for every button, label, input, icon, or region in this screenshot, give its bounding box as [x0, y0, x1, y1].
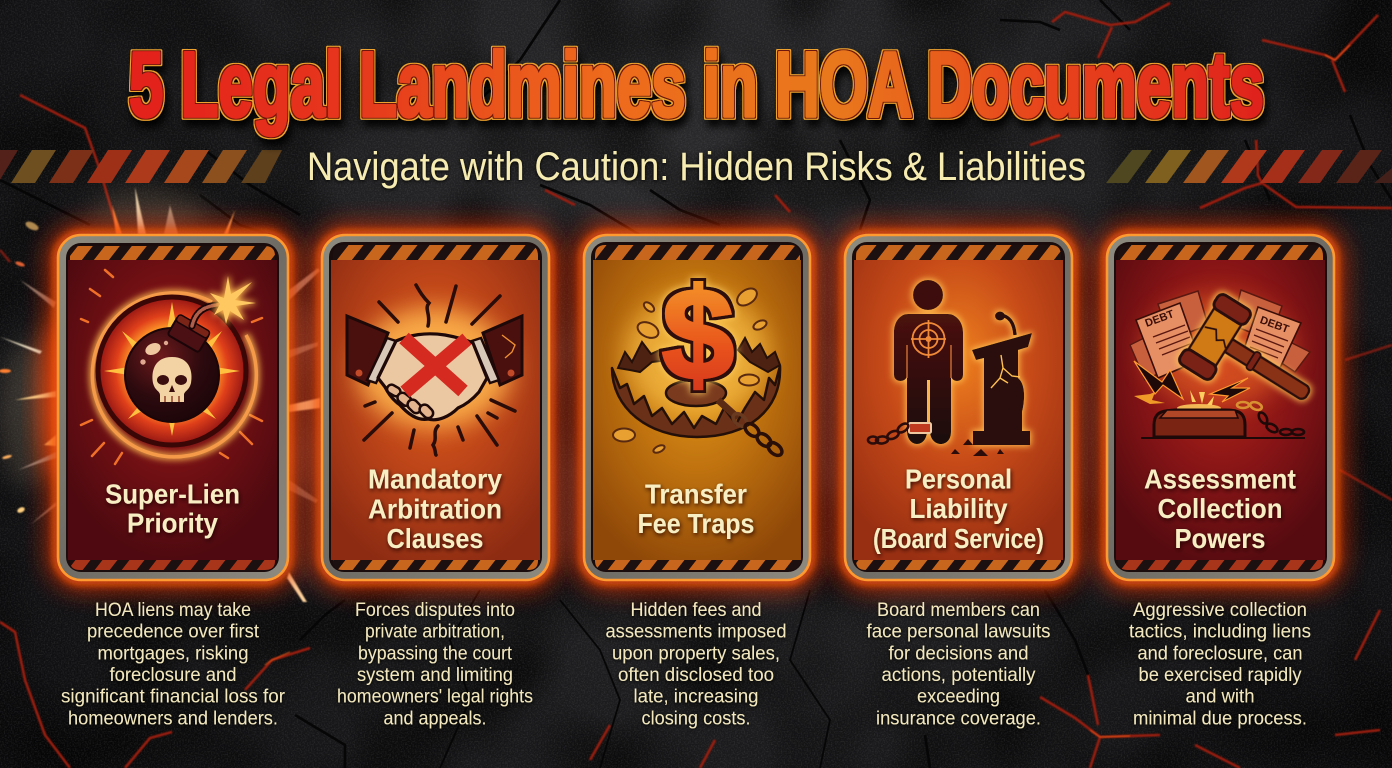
icon: gavel striking block with debt papers: DEBT	[1258, 314, 1291, 336]
icon: bear trap with dollar sign and coins: $	[662, 261, 734, 407]
heading: Assessment Collection Powers: Assessment	[1144, 464, 1296, 494]
description: Transfer Fee Traps	[606, 599, 786, 729]
description: Super-Lien Priority: precedence over first	[87, 621, 260, 643]
description: Personal Liability (Board Service): Board members can	[877, 599, 1040, 621]
panel: Mandatory Arbitration Clauses	[320, 233, 551, 582]
heading: Mandatory Arbitration Clauses: Mandatory	[368, 464, 503, 494]
heading: Assessment Collection Powers: Powers	[1174, 523, 1266, 554]
description: Assessment Collection Powers: and with	[1186, 686, 1254, 708]
description: Personal Liability (Board Service): face personal lawsuits	[866, 621, 1051, 643]
icon: gavel striking block with debt papers: DEBT	[1144, 308, 1176, 330]
description: Personal Liability (Board Service): insurance coverage.	[876, 707, 1041, 729]
description: Assessment Collection Powers: Aggressive collection	[1133, 599, 1307, 621]
description: Assessment Collection Powers: be exercised rapidly	[1138, 664, 1302, 686]
description: Personal Liability (Board Service)	[866, 599, 1051, 729]
description: Transfer Fee Traps: upon property sales,	[612, 642, 780, 664]
description: Transfer Fee Traps: assessments imposed	[606, 621, 786, 643]
icon: targeted person and cracked podium	[868, 280, 1032, 456]
description: Transfer Fee Traps: often disclosed too	[618, 664, 774, 686]
description: Assessment Collection Powers: tactics, including liens	[1129, 621, 1311, 643]
description: Transfer Fee Traps: Hidden fees and	[630, 599, 762, 621]
description: Mandatory Arbitration Clauses: bypassing the court	[358, 642, 513, 664]
heading: Transfer Fee Traps: Transfer	[645, 478, 747, 510]
heading: Transfer Fee Traps	[638, 478, 754, 539]
description: Super-Lien Priority: HOA liens may take	[95, 599, 251, 621]
icon: bomb with skull	[81, 270, 262, 464]
description: Mandatory Arbitration Clauses: homeowners' legal rights	[337, 686, 533, 708]
panel: Super-Lien Priority	[56, 233, 290, 582]
heading: Personal Liability (Board Service): Personal	[905, 464, 1012, 494]
description: Personal Liability (Board Service): exceeding	[917, 686, 1000, 708]
hazard stripes right	[1106, 150, 1392, 183]
description: Personal Liability (Board Service): for decisions and	[888, 642, 1028, 664]
description: Mandatory Arbitration Clauses: Forces disputes into	[355, 599, 515, 621]
description: Super-Lien Priority	[61, 599, 285, 729]
description: Assessment Collection Powers	[1129, 599, 1311, 729]
icon: bear trap with dollar sign and coins	[612, 261, 784, 458]
description: Mandatory Arbitration Clauses: system and limiting	[357, 664, 513, 686]
heading: Super-Lien Priority	[105, 478, 240, 538]
description: Super-Lien Priority: mortgages, risking	[98, 642, 248, 664]
panel: Personal Liability (Board Service)	[843, 233, 1074, 582]
hazard stripes left	[0, 150, 282, 183]
description: Super-Lien Priority: homeowners and lenders.	[68, 707, 278, 729]
description: Personal Liability (Board Service): actions, potentially	[882, 664, 1036, 686]
explosion debris and sparks around first card	[0, 187, 324, 602]
description: Transfer Fee Traps: late, increasing	[634, 686, 758, 708]
description: Mandatory Arbitration Clauses: and appeals.	[384, 707, 486, 729]
description: Transfer Fee Traps: closing costs.	[642, 707, 750, 729]
description: Super-Lien Priority: significant financial loss for	[61, 686, 285, 708]
heading: Super-Lien Priority: Super-Lien	[105, 478, 240, 510]
heading: Transfer Fee Traps: Fee Traps	[638, 508, 754, 539]
description: Mandatory Arbitration Clauses	[337, 599, 533, 729]
icon: gavel striking block with debt papers	[1130, 290, 1329, 438]
heading: Personal Liability (Board Service): Liability	[910, 493, 1008, 524]
heading: Super-Lien Priority: Priority	[127, 508, 219, 538]
heading: Mandatory Arbitration Clauses: Clauses	[386, 523, 484, 554]
panel: Transfer Fee Traps	[582, 233, 812, 582]
description: Assessment Collection Powers: and foreclosure, can	[1138, 642, 1302, 664]
description: Super-Lien Priority: foreclosure and	[110, 664, 236, 686]
heading: Assessment Collection Powers	[1144, 464, 1296, 554]
panel: Assessment Collection Powers	[1105, 233, 1336, 582]
icon: broken handshake with red X	[347, 285, 522, 455]
heading: Mandatory Arbitration Clauses: Arbitration	[368, 494, 502, 524]
heading: Personal Liability (Board Service): (Board Service)	[873, 523, 1044, 554]
heading: Assessment Collection Powers: Collection	[1158, 493, 1282, 524]
heading: Mandatory Arbitration Clauses	[368, 464, 503, 554]
description: Assessment Collection Powers: minimal due process.	[1133, 707, 1307, 729]
description: Mandatory Arbitration Clauses: private arbitration,	[365, 621, 505, 643]
subtitle: Navigate with Caution: Hidden Risks & Liabilities	[307, 145, 1086, 189]
heading: Personal Liability (Board Service)	[873, 464, 1044, 554]
